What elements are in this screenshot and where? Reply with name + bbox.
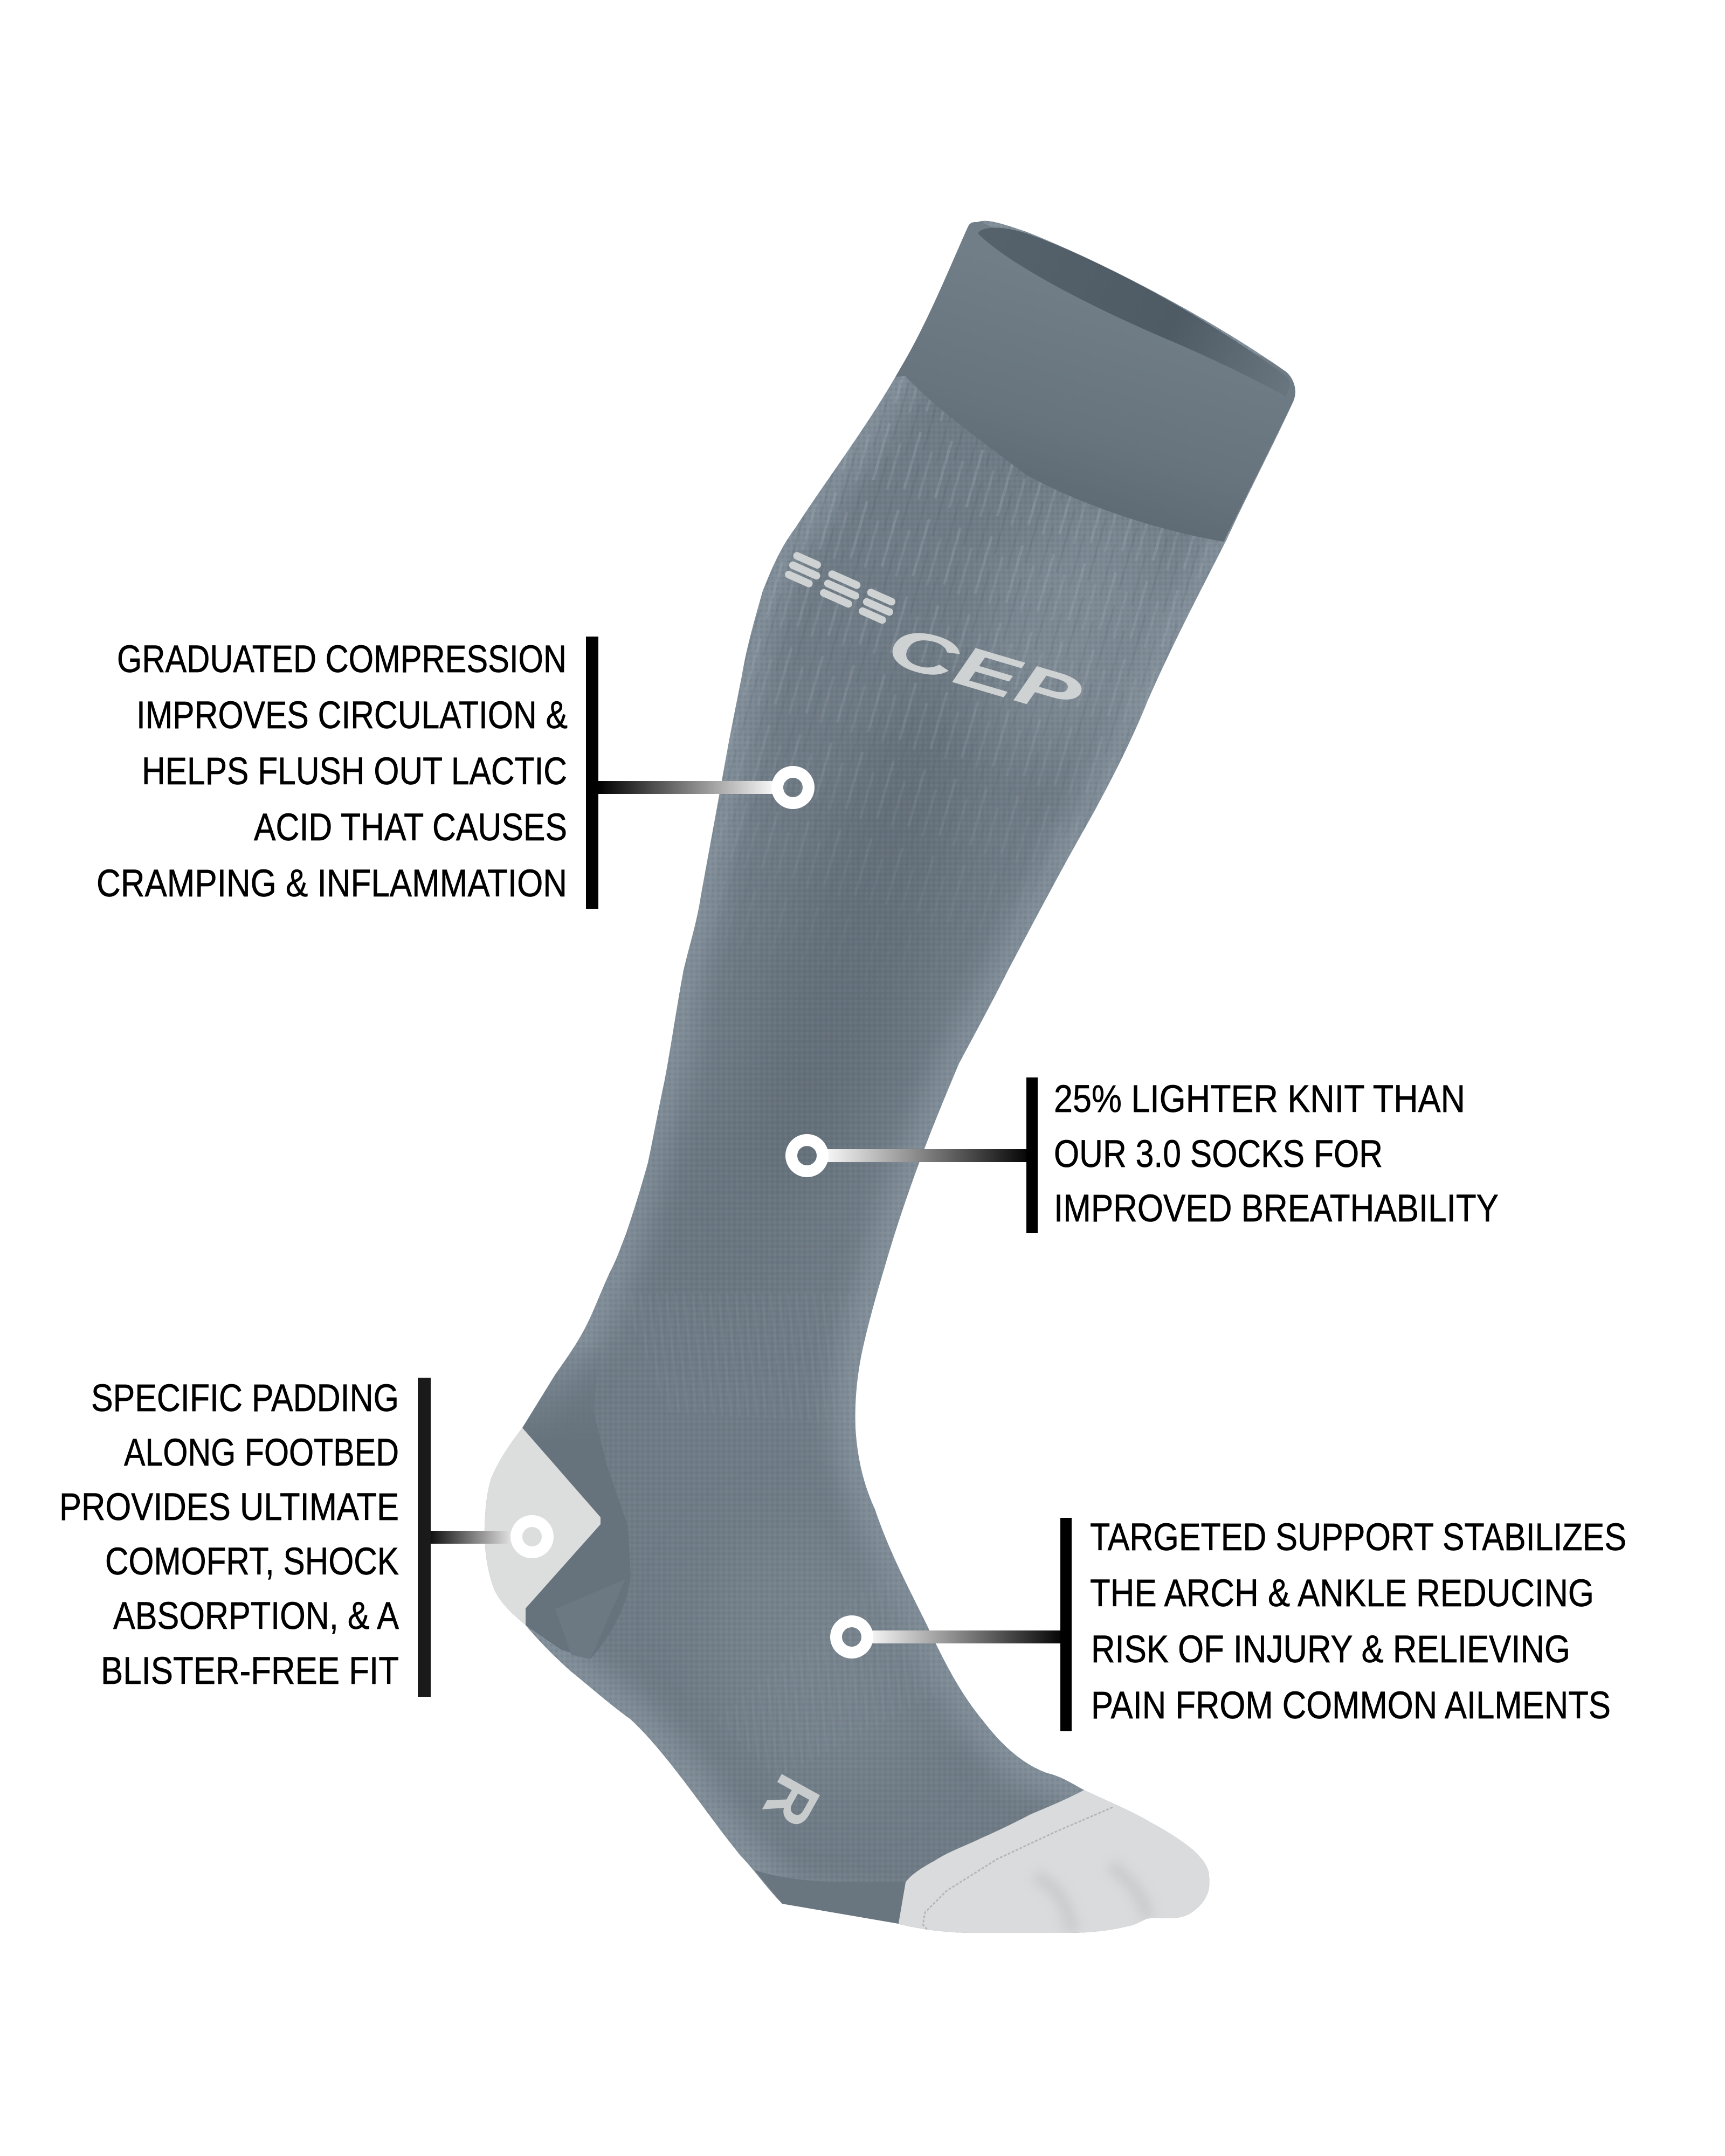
callout text: TARGETED SUPPORT STABILIZES: [1090, 1516, 1626, 1559]
cuff opening: [978, 227, 1290, 397]
callout text: PROVIDES ULTIMATE: [59, 1486, 399, 1529]
callout text: IMPROVES CIRCULATION &: [136, 694, 568, 737]
knit texture: [474, 216, 1305, 1940]
heel dark panel lower: [526, 1517, 631, 1659]
callout text: ABSORPTION, & A: [113, 1595, 399, 1637]
callout text: HELPS FLUSH OUT LACTIC: [142, 750, 567, 793]
cuff band: [884, 216, 1305, 542]
callout text: [1090, 1516, 1626, 1727]
connector line: [593, 781, 782, 794]
marker ring: [516, 1521, 548, 1552]
bracket bar: [1026, 1077, 1038, 1233]
callout text: ACID THAT CAUSES: [254, 806, 567, 849]
callout text: IMPROVED BREATHABILITY: [1054, 1187, 1499, 1230]
edge highlight: [485, 221, 1295, 1933]
marker ring: [777, 772, 809, 803]
callout text: THE ARCH & ANKLE REDUCING: [1090, 1572, 1594, 1615]
sock illustration: [474, 216, 1305, 1940]
brand emblem: [784, 551, 899, 626]
toe light patch: [895, 1779, 1240, 1940]
heel light patch: [474, 1423, 601, 1633]
marker ring: [836, 1621, 867, 1653]
bracket bar: [1060, 1518, 1072, 1731]
callout: graduated compression: [96, 637, 809, 909]
ankle rib band: [620, 1294, 873, 1423]
connector line: [819, 1149, 1032, 1162]
sole edge shadow: [755, 1870, 906, 1923]
callout text: SPECIFIC PADDING: [91, 1377, 399, 1420]
connector line: [862, 1630, 1066, 1643]
arch rib band: [717, 1574, 949, 1779]
connector line: [424, 1531, 521, 1544]
sock body: [474, 216, 1305, 1940]
callout: lighter knit: [791, 1077, 1499, 1233]
callout text: ALONG FOOTBED: [124, 1432, 399, 1474]
callout: specific padding: [59, 1377, 548, 1697]
right foot R mark: R: [749, 1764, 834, 1838]
marker ring: [791, 1140, 823, 1171]
callout text: [96, 638, 568, 905]
heel dark panel upper: [522, 1348, 631, 1575]
foot light: [663, 1492, 976, 1828]
bracket bar: [586, 637, 598, 909]
callout text: CRAMPING & INFLAMMATION: [96, 862, 567, 905]
heel dark fold: [555, 1579, 625, 1659]
brand logo text: CEP: [880, 613, 1088, 730]
callout text: 25% LIGHTER KNIT THAN: [1054, 1078, 1465, 1121]
bracket bar: [418, 1378, 431, 1697]
callout text: COMOFRT, SHOCK: [105, 1540, 399, 1583]
callout text: [59, 1377, 399, 1692]
upper calf highlight: [991, 519, 1160, 732]
callout: targeted support: [836, 1516, 1626, 1731]
callout text: [1054, 1078, 1499, 1230]
ankle shadow: [658, 1105, 798, 1321]
calf central shadow: [761, 719, 954, 1163]
callout text: OUR 3.0 SOCKS FOR: [1054, 1133, 1383, 1176]
callout text: PAIN FROM COMMON AILMENTS: [1091, 1684, 1611, 1727]
callout text: RISK OF INJURY & RELIEVING: [1091, 1628, 1570, 1671]
calf rib texture: [745, 376, 1244, 843]
toe stitching: [923, 1807, 1113, 1931]
callout text: GRADUATED COMPRESSION: [117, 638, 567, 681]
toe shading: [1035, 1865, 1148, 1932]
callout text: BLISTER-FREE FIT: [101, 1650, 399, 1692]
